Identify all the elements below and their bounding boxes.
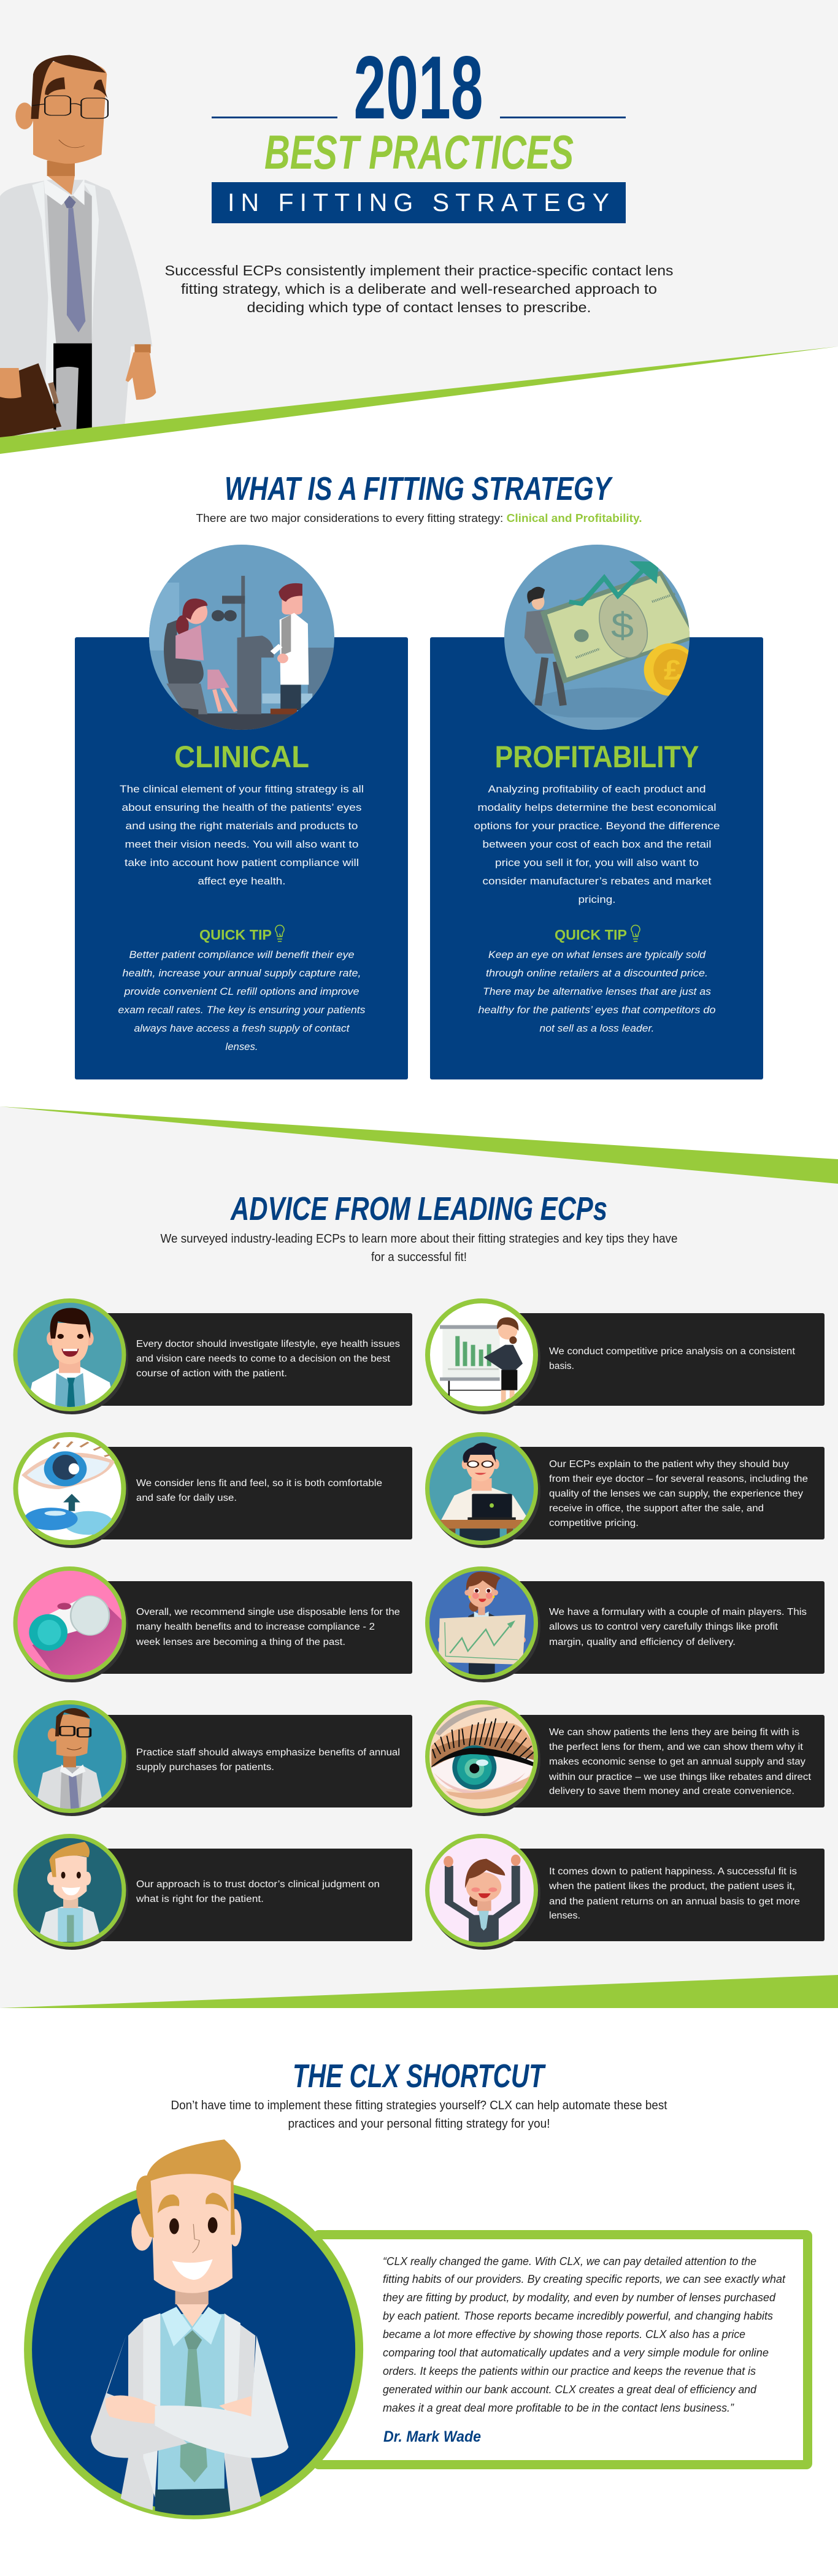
title banner: IN FITTING STRATEGY xyxy=(228,188,609,217)
profitability quick tip text: healthy for the patients’ eyes that competitors do xyxy=(479,1004,715,1016)
testimonial quote: makes it a great deal more profitable to be in the contact lens business.” xyxy=(383,2402,734,2414)
illustration: clinical exam room xyxy=(149,545,334,730)
advice intro text: We surveyed industry-leading ECPs to learn more about their fitting strategies and key tips they have xyxy=(161,1232,677,1246)
icon: contact lens case xyxy=(17,1571,121,1675)
advice text 8: delivery to save them money and create convenience. xyxy=(549,1786,794,1796)
profitability quick tip text: Keep an eye on what lenses are typically sold xyxy=(488,949,706,960)
testimonial quote: comparing tool that automatically updates and a very simple module for online xyxy=(383,2347,769,2359)
advice text 8: within our practice – we use things like rebates and direct xyxy=(548,1772,812,1782)
advice text 4: Our ECPs explain to the patient why they should buy xyxy=(549,1459,789,1470)
advice card 3 xyxy=(15,1435,412,1548)
advice text 3 xyxy=(136,1478,382,1503)
advice text 4: quality of the lenses we can supply, the experience they xyxy=(549,1489,803,1499)
advice intro text xyxy=(161,1232,677,1264)
illustration: money and growth xyxy=(504,545,690,730)
profitability body text: options for your practice. Beyond the difference xyxy=(474,820,720,832)
advice text 1: course of action with the patient. xyxy=(136,1368,287,1379)
illustration: doctor with clipboard xyxy=(0,55,156,440)
clinical quick tip text: health, increase your annual supply capture rate, xyxy=(123,967,361,979)
advice text 1: and vision care needs to come to a decision on the best xyxy=(136,1354,391,1364)
advice text 5: week lenses are becoming a thing of the past. xyxy=(136,1637,345,1647)
profitability body text xyxy=(474,783,720,905)
advice card 2 xyxy=(428,1301,825,1414)
heading: what is a fitting strategy: WHAT IS A FITTING STRATEGY xyxy=(225,470,613,507)
icon: woman holding growth chart xyxy=(429,1571,534,1675)
clinical heading: CLINICAL xyxy=(174,740,309,774)
advice text 6: margin, quality and efficiency of delivery. xyxy=(549,1637,736,1647)
advice text 6: We have a formulary with a couple of main players. This xyxy=(549,1607,807,1617)
header background xyxy=(0,0,838,454)
advice card 10 xyxy=(422,1835,825,1953)
icon: woman presenting bar chart xyxy=(440,1317,523,1405)
circle: CLX doctor backdrop xyxy=(28,2184,359,2515)
illustration: money and growth: £ xyxy=(664,655,682,686)
clinical body text: and using the right materials and products to xyxy=(125,820,358,832)
profitability body text: between your cost of each box and the retail xyxy=(482,838,712,850)
icon: cheering woman xyxy=(429,1838,534,1942)
icon: doctor with glasses xyxy=(17,1704,121,1809)
icon: man with laptop xyxy=(429,1436,534,1541)
advice text 5 xyxy=(136,1607,400,1647)
advice text 4: receive in office, the support after the sale, and xyxy=(549,1503,764,1514)
advice text 10: and the patient returns on an annual basis to get more xyxy=(549,1896,800,1907)
title banner xyxy=(212,182,626,223)
advice text 7: Practice staff should always emphasize benefits of annual xyxy=(136,1747,400,1758)
advice text 3: We consider lens fit and feel, so it is both comfortable xyxy=(136,1478,382,1489)
title rule left xyxy=(212,117,337,118)
advice text 1 xyxy=(136,1339,400,1379)
testimonial quote: “CLX really changed the game. With CLX, we can pay detailed attention to the xyxy=(383,2255,756,2267)
clinical quick tip text: always have access a fresh supply of contact xyxy=(134,1022,350,1034)
advice text 10: when the patient likes the product, the patient uses it, xyxy=(548,1881,795,1892)
advice text 1: Every doctor should investigate lifestyle, eye health issues xyxy=(136,1339,400,1349)
advice text 4: from their eye doctor – for several reasons, including the xyxy=(549,1474,808,1484)
advice card 9 xyxy=(11,1835,412,1953)
intro text: deciding which type of contact lenses to prescribe. xyxy=(247,299,591,315)
advice text 9: what is right for the patient. xyxy=(136,1894,264,1904)
advice card 5 xyxy=(11,1563,412,1682)
heading: the CLX shortcut: THE CLX SHORTCUT xyxy=(293,2058,546,2095)
icon: eye and contact lenses xyxy=(21,1441,115,1535)
advice text 4 xyxy=(549,1459,808,1528)
advice text 5: many health benefits and to increase compliance - 2 xyxy=(136,1622,375,1632)
advice text 10 xyxy=(548,1866,800,1921)
advice intro text: for a successful fit! xyxy=(371,1251,467,1264)
advice text 9 xyxy=(136,1879,380,1904)
profitability quick tip text: There may be alternative lenses that are just as xyxy=(483,986,712,997)
profitability heading: PROFITABILITY xyxy=(494,740,699,774)
profitability body text: modality helps determine the best economical xyxy=(477,802,717,813)
icon: close-up eye with lashes xyxy=(429,1704,534,1809)
profitability body text: Analyzing profitability of each product and xyxy=(488,783,705,795)
advice text 2: We conduct competitive price analysis on a consistent xyxy=(549,1346,796,1357)
advice text 10: lenses. xyxy=(549,1911,580,1921)
heading: advice from leading ECPs: ADVICE FROM LEADING ECPs xyxy=(229,1190,607,1227)
icon: doctor with dark hair xyxy=(17,1303,121,1407)
CLX intro text: Don’t have time to implement these fitting strategies yourself? CLX can help automate these best xyxy=(171,2099,667,2112)
advice text 2: basis. xyxy=(549,1361,574,1371)
clinical quick tip text: provide convenient CL refill options and improve xyxy=(123,986,359,997)
advice card 8 xyxy=(428,1701,825,1816)
title: best practices: BEST PRACTICES xyxy=(264,125,574,179)
CLX intro text: practices and your personal fitting strategy for you! xyxy=(288,2117,550,2131)
green swoosh: advice section bottom xyxy=(0,1975,838,2008)
testimonial quote: generated within our bank account. CLX creates a great deal of efficiency and xyxy=(383,2383,757,2396)
advice text 8: We can show patients the lens they are being fit with is xyxy=(549,1727,799,1738)
illustration: CLX doctor with crossed arms xyxy=(91,2139,288,2523)
profitability body text: consider manufacturer’s rebates and market xyxy=(482,875,712,887)
CLX intro text xyxy=(171,2099,667,2131)
clinical card background xyxy=(75,637,408,1079)
profitability card background xyxy=(430,637,763,1079)
clinical body text: The clinical element of your fitting strategy is all xyxy=(120,783,364,795)
clinical body text: take into account how patient compliance will xyxy=(125,857,359,868)
advice text 7: supply purchases for patients. xyxy=(136,1762,274,1773)
clinical quick tip text: Better patient compliance will benefit their eye xyxy=(129,949,355,960)
green swoosh: advice section top xyxy=(0,1106,838,1184)
intro text: Successful ECPs consistently implement their practice-specific contact lens xyxy=(164,263,674,278)
panel: clinical xyxy=(75,538,408,1079)
profitability quick tip text: not sell as a loss leader. xyxy=(540,1022,654,1034)
profitability quick tip heading: QUICK TIP xyxy=(555,927,627,943)
clinical body text: meet their vision needs. You will also want to xyxy=(125,838,358,850)
testimonial quote: by each patient. Those reports became incredibly powerful, and changing habits xyxy=(383,2310,773,2322)
clinical quick tip text: lenses. xyxy=(226,1041,258,1052)
panel: profitability xyxy=(430,538,763,1079)
profitability quick tip text: through online retailers at a discounted price. xyxy=(486,967,708,979)
testimonial quote: they are fitting by product, by modality, and even by number of lenses purchased xyxy=(383,2291,776,2304)
illustration: money and growth: $ xyxy=(611,606,634,646)
intro text: fitting strategy, which is a deliberate and well-researched approach to xyxy=(181,281,657,297)
profitability quick tip text xyxy=(479,949,715,1034)
advice text 10: It comes down to patient happiness. A successful fit is xyxy=(549,1866,797,1877)
title: 2018: 2018 xyxy=(353,37,483,137)
advice card 1 xyxy=(11,1298,412,1414)
clinical quick tip heading: QUICK TIP xyxy=(199,927,272,943)
clinical body text xyxy=(120,783,364,887)
profitability body text: pricing. xyxy=(578,894,616,905)
advice text 9: Our approach is to trust doctor’s clinical judgment on xyxy=(136,1879,380,1890)
advice card 6 xyxy=(428,1568,825,1682)
advice text 3: and safe for daily use. xyxy=(136,1493,237,1503)
testimonial quote: became a lot more effective by showing those reports. CLX also has a price xyxy=(383,2328,745,2340)
title rule right xyxy=(500,117,626,118)
clinical body text: about ensuring the health of the patients’ eyes xyxy=(121,802,362,813)
subheading: two considerations: There are two major considerations to every fitting strategy: Clinical and Profitability. xyxy=(196,512,642,524)
advice text 6: allows us to control very carefully things like profit xyxy=(549,1622,778,1632)
advice text 5: Overall, we recommend single use disposable lens for the xyxy=(136,1607,400,1617)
advice text 7 xyxy=(136,1747,400,1773)
advice card 7 xyxy=(11,1700,412,1818)
clinical body text: affect eye health. xyxy=(198,875,286,887)
advice text 8 xyxy=(548,1727,812,1796)
testimonial box xyxy=(318,2235,807,2464)
advice text 6 xyxy=(549,1607,807,1647)
icon: blond doctor xyxy=(17,1838,121,1942)
advice text 8: the perfect lens for them, and we can show them why it xyxy=(549,1742,804,1752)
advice text 2 xyxy=(549,1346,796,1371)
testimonial quote xyxy=(383,2255,786,2414)
advice text 4: competitive pricing. xyxy=(549,1518,639,1528)
testimonial quote: orders. It keeps the patients within our practice and keeps the revenue that is xyxy=(383,2365,756,2377)
clinical quick tip text xyxy=(118,949,366,1052)
advice section background xyxy=(0,1106,838,2008)
intro text xyxy=(164,263,674,315)
clinical quick tip text: exam recall rates. The key is ensuring your patients xyxy=(118,1004,366,1016)
profitability body text: price you sell it for, you will also want to xyxy=(495,857,699,868)
advice text 8: makes economic sense to get an annual supply and stay xyxy=(549,1757,805,1767)
green swoosh: header xyxy=(0,347,838,454)
advice card 4 xyxy=(422,1430,825,1549)
testimonial attribution: Dr. Mark Wade xyxy=(383,2428,481,2445)
testimonial quote: fitting habits of our providers. By creating specific reports, we can see exactly what xyxy=(383,2273,786,2285)
